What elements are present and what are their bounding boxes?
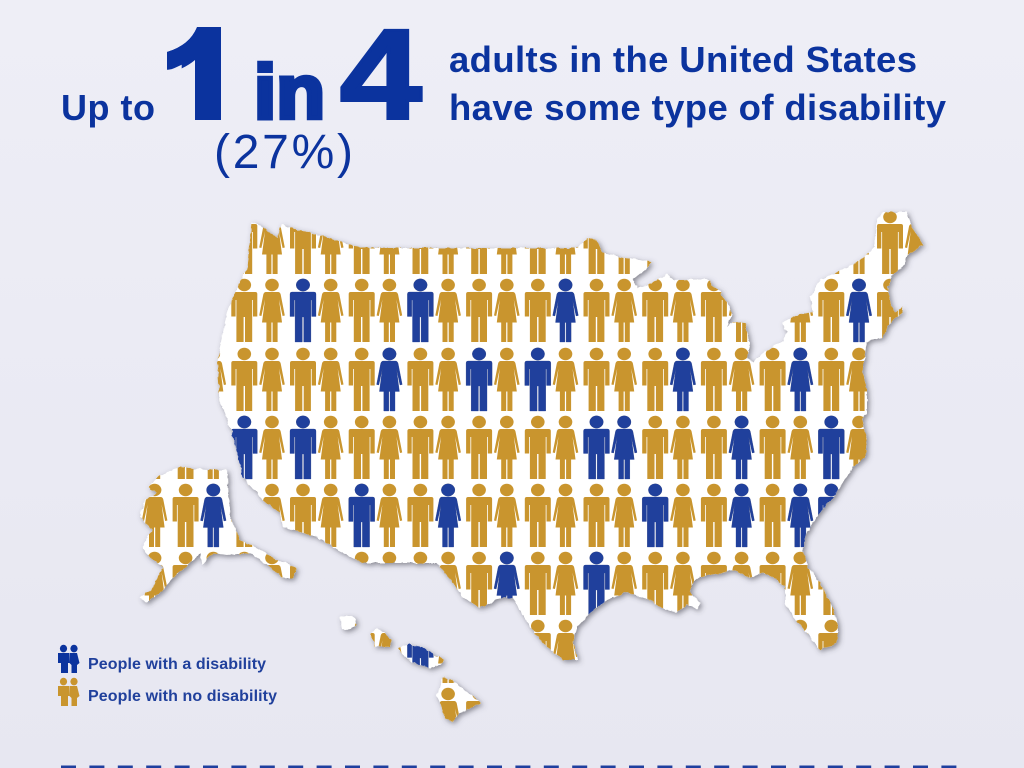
people pattern clipped to map [142, 211, 931, 751]
label: people with no disability: People with no disability [88, 688, 277, 705]
title [63, 27, 946, 178]
map of the United States filled with people icons [140, 211, 930, 751]
icon: people with a disability [58, 645, 80, 673]
title: second line: have some type of disability [449, 87, 947, 128]
legend [58, 645, 277, 706]
big word: in: in [254, 50, 325, 135]
icon: people with no disability [58, 678, 80, 706]
title: rest of the sentence: adults in the United States [449, 39, 917, 80]
label: people with a disability: People with a disability [88, 656, 266, 673]
title: up to: Up to [61, 87, 155, 128]
big number: 1: 1 [154, 0, 255, 151]
percentage: (27%) [214, 126, 353, 179]
people with no disability [142, 211, 931, 751]
big number: 4: 4 [340, 3, 422, 146]
map silhouette [140, 212, 923, 722]
people with a disability [200, 279, 872, 683]
